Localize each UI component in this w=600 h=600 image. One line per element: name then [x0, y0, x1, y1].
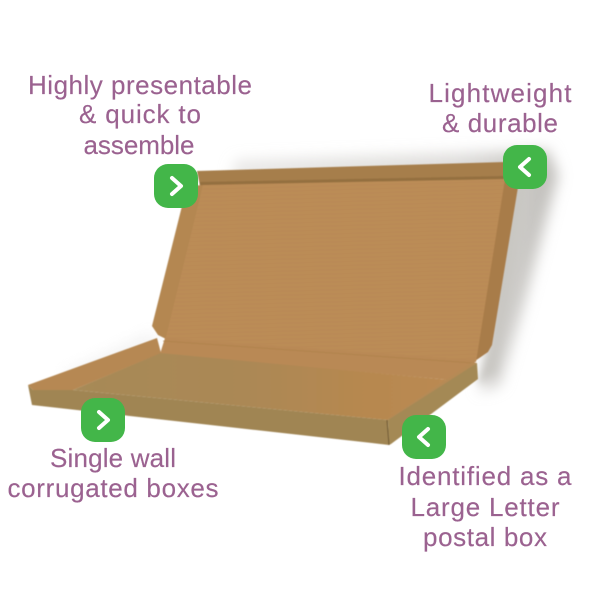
hinge fold panel	[160, 338, 476, 380]
tray back left flap	[28, 338, 161, 390]
icon: green arrow right, top left	[154, 164, 198, 208]
icon: green arrow left, bottom right	[402, 415, 446, 459]
lid main panel	[165, 179, 505, 362]
tray right flap strip	[388, 362, 477, 424]
heading: large letter: postal box	[423, 522, 547, 552]
lid top flap	[197, 162, 505, 186]
box	[28, 162, 518, 445]
heading: lightweight	[428, 78, 572, 138]
heading: highly presentable: & quick to	[79, 99, 201, 129]
front wall	[28, 385, 389, 445]
heading: highly presentable: assemble	[84, 130, 194, 160]
heading: large letter: Large Letter	[410, 492, 560, 522]
heading: single wall: corrugated boxes	[8, 473, 218, 503]
heading: highly presentable	[28, 70, 252, 160]
box shadow	[60, 150, 558, 392]
right wall	[388, 363, 478, 445]
lid left flap	[152, 185, 204, 339]
heading: large letter: Identified as a	[398, 461, 572, 491]
tray floor	[73, 353, 450, 420]
heading: large letter	[398, 461, 572, 552]
heading: single wall: Single wall	[50, 443, 176, 473]
lid right flap	[475, 180, 518, 361]
icon: green arrow left, top right	[503, 145, 547, 189]
heading: lightweight: Lightweight	[428, 78, 572, 108]
icon: green arrow right, bottom left	[81, 398, 125, 442]
heading: single wall	[8, 443, 218, 503]
heading: lightweight: & durable	[442, 108, 558, 138]
heading: highly presentable: Highly presentable	[28, 70, 252, 100]
